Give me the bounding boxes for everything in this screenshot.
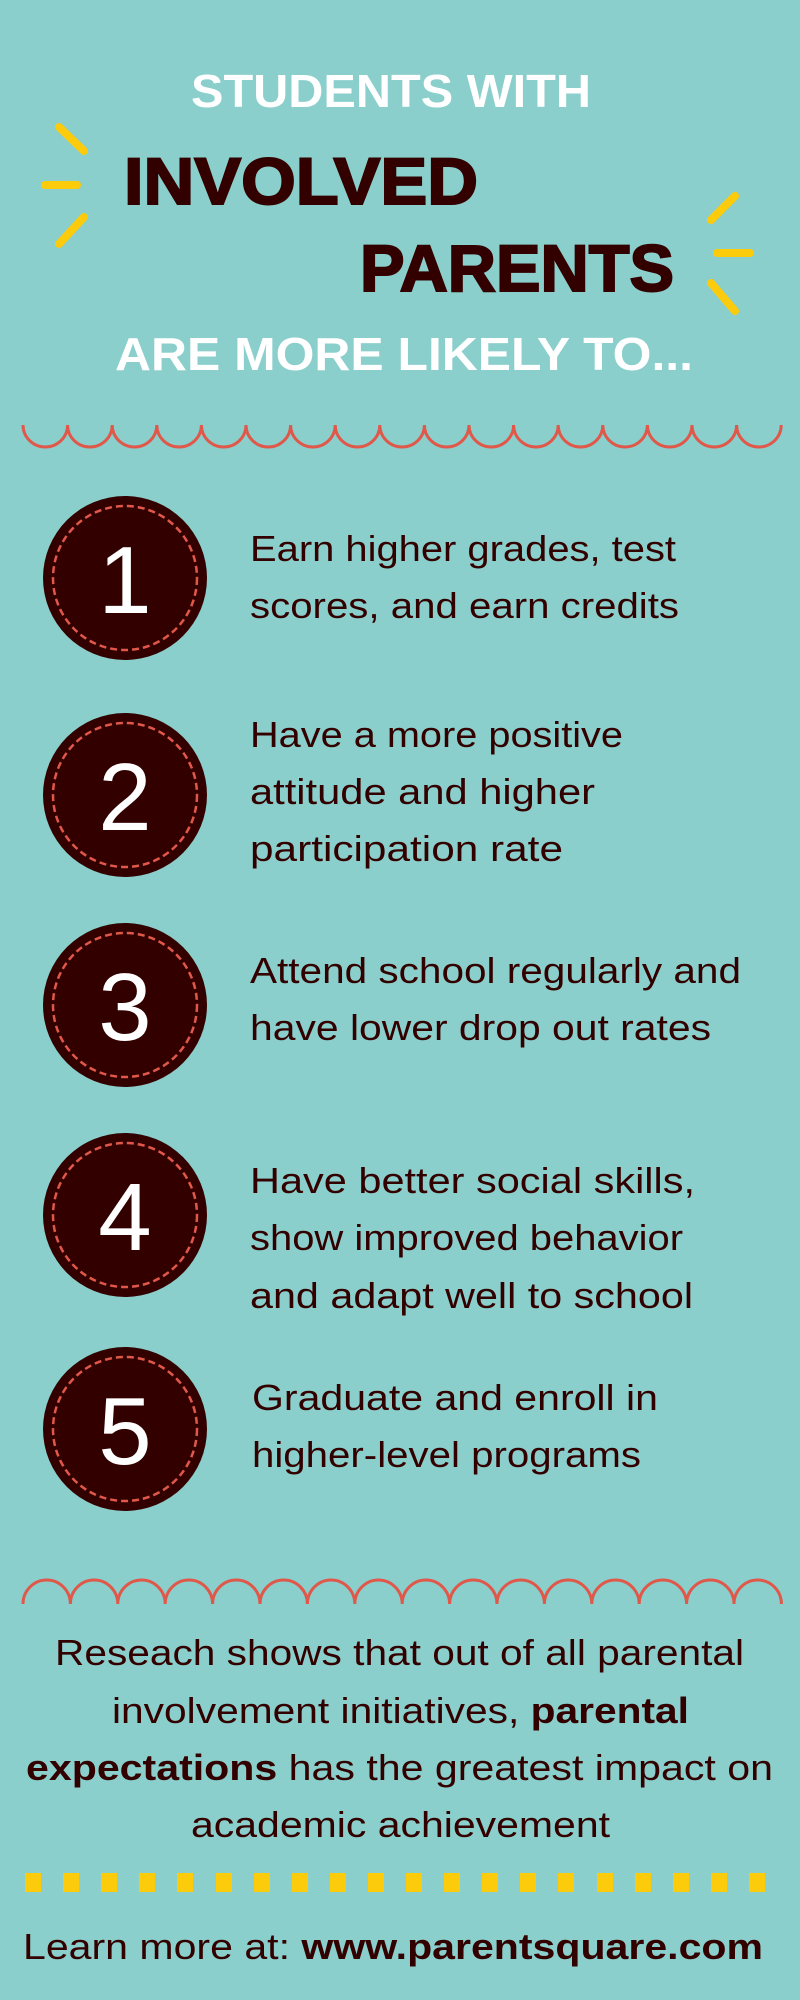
research paragraph (26, 1632, 773, 1845)
text 3 (250, 950, 741, 1048)
text 1: scores, and earn credits (250, 585, 679, 626)
badge 3 (43, 923, 207, 1087)
text 4 (250, 1160, 695, 1316)
scallop divider bottom (23, 1580, 781, 1604)
title line: involved: INVOLVED (124, 144, 478, 218)
research paragraph: expectations has the greatest impact on (26, 1747, 773, 1788)
text 2 (250, 714, 623, 869)
item 1 (43, 496, 679, 660)
badge 3: 3 (98, 954, 152, 1061)
text 5: higher-level programs (252, 1434, 641, 1475)
badge 2: 2 (98, 744, 152, 851)
research paragraph: academic achievement (191, 1804, 610, 1845)
research paragraph: involvement initiatives, parental (112, 1690, 689, 1731)
text 5 (252, 1377, 658, 1475)
badge 4: 4 (98, 1164, 152, 1271)
badge 5 (43, 1347, 207, 1511)
text 4: Have better social skills, (250, 1160, 695, 1201)
text 3: have lower drop out rates (250, 1007, 711, 1048)
text 2: participation rate (250, 828, 563, 869)
text 5: Graduate and enroll in (252, 1377, 658, 1418)
scallop divider top (23, 425, 781, 447)
text 1: Earn higher grades, test (250, 528, 676, 569)
text 4: show improved behavior (250, 1217, 683, 1258)
research paragraph: Reseach shows that out of all parental (55, 1632, 744, 1673)
title line: are more likely to: ARE MORE LIKELY TO... (115, 328, 693, 380)
badge 2 (43, 713, 207, 877)
title line: students with: STUDENTS WITH (191, 65, 591, 117)
badge 1 (43, 496, 207, 660)
badge 4 (43, 1133, 207, 1297)
badge 5: 5 (98, 1378, 152, 1485)
title line: parents: PARENTS (360, 231, 674, 305)
badge 1: 1 (98, 527, 152, 634)
text 3: Attend school regularly and (250, 950, 741, 991)
item 3 (43, 923, 741, 1087)
icon: yellow burst right (711, 196, 750, 311)
text 2: Have a more positive (250, 714, 623, 755)
text 2: attitude and higher (250, 771, 595, 812)
item 5 (43, 1347, 658, 1511)
footer link: Learn more at: www.parentsquare.com (23, 1926, 763, 1967)
text 1 (250, 528, 679, 626)
icon: yellow burst left (45, 127, 84, 244)
yellow square dotted divider (25, 1873, 765, 1892)
title (115, 65, 693, 380)
text 4: and adapt well to school (250, 1275, 693, 1316)
item 2 (43, 713, 623, 877)
item 4 (43, 1133, 695, 1316)
